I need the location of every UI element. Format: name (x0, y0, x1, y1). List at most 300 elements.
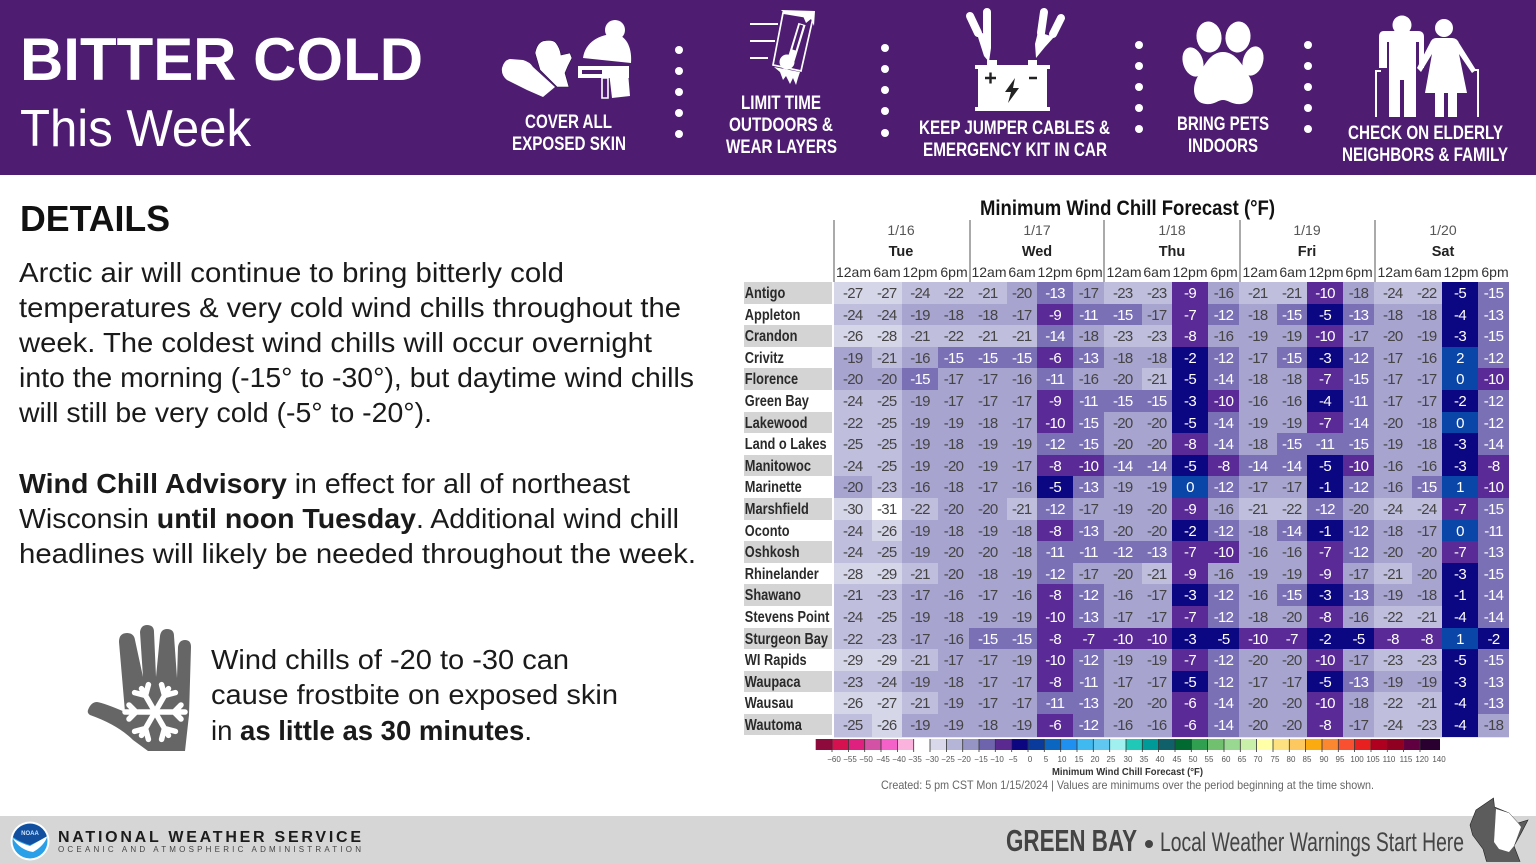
row: Marinette: -19 (1113, 479, 1133, 496)
chart column headers: Sat (1432, 244, 1454, 260)
row: Oshkosh: -7 (1184, 544, 1196, 561)
row: Antigo: -5 (1454, 285, 1466, 302)
chart column headers: 6pm (1210, 264, 1238, 280)
row: Rhinelander: -20 (1113, 566, 1133, 583)
footer bar (0, 798, 1536, 864)
row: Shawano: -3 (1184, 587, 1196, 604)
row: Crivitz: -19 (843, 350, 863, 367)
row: Wautoma: -16 (1147, 717, 1167, 734)
chart column headers: 12am (1377, 264, 1413, 280)
row: WI Rapids: -20 (1282, 652, 1302, 669)
chart column headers: 6am (1143, 264, 1171, 280)
chart column headers: 12pm (1037, 264, 1073, 280)
row: Waupaca: -17 (1012, 674, 1032, 691)
row: Stevens Point: -19 (1012, 609, 1032, 626)
row: Waupaca: Waupaca (745, 674, 801, 691)
row: Oconto: -13 (1079, 523, 1098, 540)
row: Manitowoc: -16 (1383, 458, 1403, 475)
row: Antigo: -9 (1184, 285, 1196, 302)
row: Manitowoc: -8 (1488, 458, 1499, 475)
row: Lakewood: -14 (1214, 415, 1233, 432)
row: Waupaca: -3 (1454, 674, 1466, 691)
row: Rhinelander: -17 (1079, 566, 1098, 583)
row: Antigo: -17 (1079, 285, 1098, 302)
icon: mittens, hat and scarf (502, 20, 631, 98)
row: Wautoma: -19 (1012, 717, 1032, 734)
row: Wautoma: -16 (1113, 717, 1133, 734)
row: Appleton: -24 (843, 307, 863, 324)
chart column headers: Fri (1298, 244, 1316, 260)
bullet (1145, 840, 1153, 848)
row: Appleton: -13 (1349, 307, 1368, 324)
legend tick labels: 65 (1238, 755, 1247, 764)
row: Oconto: -2 (1184, 523, 1196, 540)
row: Marshfield: -20 (944, 501, 963, 518)
row: Lakewood: -19 (1282, 415, 1302, 432)
row: Land o Lakes: -18 (944, 436, 963, 453)
row: Stevens Point: -4 (1454, 609, 1466, 626)
row: Marinette: -17 (1248, 479, 1268, 496)
NOAA logo (10, 822, 50, 860)
row: Lakewood: -25 (877, 415, 897, 432)
row: Rhinelander: -16 (1214, 566, 1233, 583)
row: Florence: -18 (1282, 371, 1302, 388)
row: Oconto: -24 (843, 523, 863, 540)
row: Appleton: -12 (1214, 307, 1233, 324)
label: keep jumper cables: KEEP JUMPER CABLES & (919, 118, 1110, 139)
chart column headers: 6pm (1345, 264, 1373, 280)
row: WI Rapids: -15 (1484, 652, 1503, 669)
row: Stevens Point: -18 (944, 609, 963, 626)
row: Wausau: -6 (1184, 695, 1196, 712)
legend tick labels: 95 (1336, 755, 1345, 764)
row: Waupaca: -17 (1113, 674, 1133, 691)
row: Land o Lakes: Land o Lakes (745, 436, 827, 453)
row: Marshfield: -20 (1349, 501, 1368, 518)
row: Wautoma: -6 (1184, 717, 1196, 734)
row: Wautoma: -25 (843, 717, 863, 734)
row: Oconto: -12 (1349, 523, 1368, 540)
row: WI Rapids: -17 (978, 652, 998, 669)
row: WI Rapids: -23 (1383, 652, 1403, 669)
legend tick labels: 50 (1189, 755, 1198, 764)
row: Florence: -17 (1417, 371, 1437, 388)
row: Marshfield: -20 (1147, 501, 1167, 518)
row: Manitowoc: -5 (1184, 458, 1196, 475)
label: check on elderly: CHECK ON ELDERLY (1348, 123, 1503, 144)
row: WI Rapids: -29 (843, 652, 863, 669)
row: Crivitz: -15 (978, 350, 998, 367)
chart column headers: Tue (889, 244, 913, 260)
row: Appleton: -13 (1484, 307, 1503, 324)
row: Rhinelander: -12 (1045, 566, 1065, 583)
row: Green Bay: -15 (1113, 393, 1133, 410)
row: Green Bay: Green Bay (745, 393, 809, 410)
row: Green Bay: -17 (978, 393, 998, 410)
row: Oconto (745, 520, 1509, 541)
row: Antigo (744, 282, 1509, 304)
row: Shawano: Shawano (745, 587, 801, 604)
row: Oshkosh: -25 (877, 544, 897, 561)
row: Rhinelander: -19 (1012, 566, 1032, 583)
row: Marinette: -16 (910, 479, 930, 496)
row: Manitowoc: -8 (1049, 458, 1061, 475)
row: Crandon: -21 (1012, 328, 1032, 345)
row: Antigo: -21 (978, 285, 998, 302)
legend tick labels: 20 (1091, 755, 1100, 764)
row: Marshfield: -19 (1113, 501, 1133, 518)
row: Rhinelander: -15 (1484, 566, 1503, 583)
row: Land o Lakes: -25 (877, 436, 897, 453)
legend tick labels: 5 (1044, 755, 1049, 764)
row: Oconto: -20 (1147, 523, 1167, 540)
chart column headers: 12am (971, 264, 1007, 280)
row: Shawano: -16 (944, 587, 963, 604)
row: Oshkosh: -20 (1417, 544, 1437, 561)
row: Oshkosh: -16 (1248, 544, 1268, 561)
row: Sturgeon Bay: -23 (877, 630, 897, 648)
row: Green Bay: -25 (877, 393, 897, 410)
row: Oshkosh: -7 (1454, 544, 1466, 561)
row: Sturgeon Bay: -10 (1248, 630, 1268, 648)
row: Shawano: -13 (1349, 587, 1368, 604)
row: Waupaca: -17 (1147, 674, 1167, 691)
row: Marinette: -17 (978, 479, 998, 496)
row: Marshfield: -15 (1484, 501, 1503, 518)
label: keep jumper cables: EMERGENCY KIT IN CAR (923, 140, 1107, 161)
row: Green Bay: -17 (1383, 393, 1403, 410)
row: Manitowoc: Manitowoc (745, 458, 811, 475)
chart column headers: 6pm (1075, 264, 1103, 280)
details paragraph 2: advisory (19, 468, 696, 569)
row: Stevens Point: -16 (1349, 609, 1368, 626)
creation note: Created: 5 pm CST Mon 1/15/2024 | Values are minimums over the period beginning at the time shown. (881, 778, 1374, 792)
icon: elderly couple (1375, 16, 1479, 117)
row: Manitowoc: -14 (1248, 458, 1268, 475)
row: Rhinelander: -17 (1349, 566, 1368, 583)
row: Crivitz: -18 (1147, 350, 1167, 367)
row: Sturgeon Bay: -8 (1421, 630, 1433, 648)
row: Sturgeon Bay: -2 (1319, 630, 1331, 648)
row: Crandon: -22 (944, 328, 963, 345)
row: Sturgeon Bay: -16 (944, 630, 963, 648)
row: WI Rapids: -12 (1079, 652, 1098, 669)
row: Wausau: -21 (910, 695, 930, 712)
row: Waupaca: -19 (1383, 674, 1403, 691)
row: Crandon: -8 (1184, 328, 1196, 345)
row: Florence: -11 (1046, 371, 1064, 388)
chart column headers: 6am (1279, 264, 1307, 280)
row: Green Bay: -15 (1147, 393, 1167, 410)
row: Crivitz: -3 (1319, 350, 1331, 367)
row: Waupaca: -23 (843, 674, 863, 691)
label: limit time outdoors: WEAR LAYERS (726, 137, 837, 158)
chart column headers: 6am (1414, 264, 1442, 280)
row: Antigo: -27 (843, 285, 863, 302)
row: Manitowoc: -25 (877, 458, 897, 475)
chart column headers: 1/18 (1158, 222, 1186, 238)
row: Marinette: -20 (843, 479, 863, 496)
row: Green Bay: -4 (1319, 393, 1331, 410)
row: Crandon: Crandon (745, 328, 797, 345)
row: Sturgeon Bay: -15 (978, 630, 998, 648)
row: Appleton: -4 (1454, 307, 1466, 324)
row: Wausau: -17 (1012, 695, 1032, 712)
row: Marinette: -1 (1319, 479, 1331, 496)
row: Stevens Point: -25 (877, 609, 897, 626)
legend tick labels: 15 (1075, 755, 1084, 764)
row: Shawano: -12 (1079, 587, 1098, 604)
row: Lakewood (744, 412, 1509, 433)
row: Oconto: -1 (1319, 523, 1331, 540)
row: Crivitz: -17 (1248, 350, 1268, 367)
label: bring pets indoors: INDOORS (1188, 136, 1258, 157)
row: Green Bay: -3 (1184, 393, 1196, 410)
row: Antigo: -20 (1012, 285, 1032, 302)
row: Green Bay: -2 (1454, 393, 1466, 410)
chart column headers: 12pm (1443, 264, 1479, 280)
row: Antigo: -21 (1248, 285, 1268, 302)
NOAA logo: NOAA (21, 831, 39, 837)
row: Manitowoc: -10 (1079, 458, 1098, 475)
row: Crivitz: -17 (1383, 350, 1403, 367)
chart column headers: 1/17 (1023, 222, 1051, 238)
row: Crandon: -16 (1214, 328, 1233, 345)
row: Green Bay: -16 (1248, 393, 1268, 410)
legend tick labels: 35 (1140, 755, 1149, 764)
row: Oshkosh: -18 (1012, 544, 1032, 561)
row: Marinette: 1 (1456, 479, 1464, 496)
row: Marshfield: -22 (1282, 501, 1302, 518)
row: Land o Lakes: -19 (910, 436, 930, 453)
row: Crandon: -19 (1248, 328, 1268, 345)
row: Appleton: -5 (1319, 307, 1331, 324)
row: Oconto: 0 (1456, 523, 1464, 540)
row: Stevens Point: -22 (1383, 609, 1403, 626)
icon: hand with snowflake (88, 625, 191, 751)
row: Wautoma (744, 714, 1509, 738)
row: Shawano: -1 (1454, 587, 1466, 604)
row: Antigo: -21 (1282, 285, 1302, 302)
row: Oshkosh: -10 (1214, 544, 1233, 561)
row: Rhinelander: -21 (910, 566, 930, 583)
row: Wausau (744, 692, 1509, 714)
row: Crandon: -10 (1315, 328, 1335, 345)
row: Sturgeon Bay: -7 (1286, 630, 1298, 648)
legend tick labels: −35 (908, 755, 922, 764)
row: Sturgeon Bay: -2 (1488, 630, 1499, 648)
row: Florence: -10 (1484, 371, 1503, 388)
icon: paw print (1179, 20, 1267, 104)
legend tick labels: 100 (1350, 755, 1364, 764)
row: Land o Lakes: -15 (1282, 436, 1302, 453)
row: Rhinelander: -19 (1282, 566, 1302, 583)
row: Manitowoc: -20 (944, 458, 963, 475)
row: Oconto: -20 (1113, 523, 1133, 540)
row: Lakewood: -19 (910, 415, 930, 432)
row: Appleton: -17 (1012, 307, 1032, 324)
row: Crandon: -19 (1417, 328, 1437, 345)
row: Stevens Point: -17 (1113, 609, 1133, 626)
legend tick labels: −15 (974, 755, 988, 764)
row: Wautoma: -18 (1484, 717, 1503, 734)
row: Oconto: -12 (1214, 523, 1233, 540)
row: Land o Lakes: -20 (1147, 436, 1167, 453)
row: Antigo: -16 (1214, 285, 1233, 302)
row: Crivitz: -12 (1349, 350, 1368, 367)
row: Manitowoc: -3 (1454, 458, 1466, 475)
row: Sturgeon Bay: -3 (1184, 630, 1196, 648)
row: Shawano: -21 (843, 587, 863, 604)
row: Green Bay: -19 (910, 393, 930, 410)
row: Marinette (745, 476, 1509, 498)
legend tick labels: −45 (876, 755, 890, 764)
legend tick labels: −25 (941, 755, 955, 764)
row: Sturgeon Bay: -7 (1083, 630, 1094, 648)
row: Crivitz: -15 (1282, 350, 1302, 367)
legend tick labels: −5 (1008, 755, 1018, 764)
row: Shawano: -19 (1383, 587, 1403, 604)
row: Marinette: -13 (1079, 479, 1098, 496)
row: Oconto: Oconto (745, 523, 790, 540)
row: Rhinelander: -9 (1319, 566, 1331, 583)
row: WI Rapids: -7 (1184, 652, 1196, 669)
row: Appleton: -18 (1417, 307, 1437, 324)
row: Rhinelander: -29 (877, 566, 897, 583)
row: Marshfield: Marshfield (745, 501, 809, 518)
row: Antigo: -18 (1349, 285, 1368, 302)
legend tick labels: 45 (1173, 755, 1182, 764)
row: Wautoma: -8 (1319, 717, 1331, 734)
row: Crivitz (745, 347, 1509, 368)
row: Manitowoc: -10 (1349, 458, 1368, 475)
legend tick labels: 0 (1028, 755, 1033, 764)
row: Oshkosh: -13 (1484, 544, 1503, 561)
row: Lakewood: -20 (1147, 415, 1167, 432)
row: Marinette: -18 (944, 479, 963, 496)
row: Marshfield: -21 (1248, 501, 1268, 518)
row: Manitowoc: -24 (843, 458, 863, 475)
row: Antigo: -22 (944, 285, 963, 302)
row: Crivitz: -12 (1484, 350, 1503, 367)
row: Manitowoc: -19 (978, 458, 998, 475)
row: Wautoma: -6 (1049, 717, 1061, 734)
row: Appleton: -17 (1147, 307, 1167, 324)
row: Green Bay: -24 (843, 393, 863, 410)
row: Appleton: -7 (1184, 307, 1196, 324)
legend tick labels: 110 (1383, 755, 1396, 764)
row: Lakewood: -19 (1248, 415, 1268, 432)
row: Crandon: -21 (978, 328, 998, 345)
legend tick labels: −60 (827, 755, 841, 764)
row: Wausau: -11 (1046, 695, 1064, 712)
details paragraph 2: advisory: Wind Chill Advisory in effect for all of northeast (19, 468, 630, 499)
row: Lakewood: Lakewood (745, 415, 807, 432)
row: Florence: -7 (1319, 371, 1331, 388)
row: WI Rapids: WI Rapids (745, 652, 807, 669)
row: Sturgeon Bay: -8 (1049, 630, 1061, 648)
dots separator 2 (881, 44, 889, 137)
row: Florence: -17 (944, 371, 963, 388)
row: Manitowoc: -19 (910, 458, 930, 475)
row: Wausau: -13 (1079, 695, 1098, 712)
icon: frozen thermometer (750, 10, 815, 85)
row: Antigo: -10 (1315, 285, 1335, 302)
row: Waupaca: -11 (1079, 674, 1098, 691)
row: Marshfield (744, 498, 1509, 520)
row: Antigo: -24 (1383, 285, 1403, 302)
details heading: DETAILS (20, 198, 170, 239)
row: Wautoma: -12 (1079, 717, 1098, 734)
row: WI Rapids: -5 (1454, 652, 1466, 669)
row: Oshkosh: -16 (1282, 544, 1302, 561)
row: Waupaca: -19 (910, 674, 930, 691)
row: Lakewood: -20 (1383, 415, 1403, 432)
row: Rhinelander: -28 (843, 566, 863, 583)
row: Land o Lakes: -19 (1012, 436, 1032, 453)
row: Appleton: -18 (1383, 307, 1403, 324)
row: Sturgeon Bay: -10 (1113, 630, 1133, 648)
row: Wautoma: -19 (944, 717, 963, 734)
row: Waupaca: -18 (944, 674, 963, 691)
row: Marshfield: -24 (1383, 501, 1403, 518)
row: Oshkosh: -24 (843, 544, 863, 561)
row: Appleton (745, 304, 1509, 325)
row: Oconto: -18 (944, 523, 963, 540)
frostbite callout text (211, 644, 618, 746)
row: Manitowoc: -17 (1012, 458, 1032, 475)
row: Shawano: -16 (1248, 587, 1268, 604)
row: Wautoma: -14 (1214, 717, 1233, 734)
row: Oshkosh (744, 541, 1509, 563)
legend tick labels: −30 (925, 755, 939, 764)
row: Crandon: -23 (1147, 328, 1167, 345)
row: Crivitz: -12 (1214, 350, 1233, 367)
row: Waupaca: -5 (1319, 674, 1331, 691)
row: Land o Lakes: -12 (1045, 436, 1065, 453)
legend tick labels: −55 (843, 755, 857, 764)
legend tick labels: −50 (859, 755, 873, 764)
row: Stevens Point: Stevens Point (745, 609, 829, 626)
row: Wausau: -20 (1282, 695, 1302, 712)
row: WI Rapids: -12 (1214, 652, 1233, 669)
row: Florence: -17 (978, 371, 998, 388)
row: Marinette: -16 (1012, 479, 1032, 496)
row: Stevens Point: -12 (1214, 609, 1233, 626)
row: Wausau: -20 (1248, 695, 1268, 712)
row: Marinette: -12 (1349, 479, 1368, 496)
row: Florence: -5 (1184, 371, 1196, 388)
row: Shawano: -17 (1147, 587, 1167, 604)
row: Crivitz: -18 (1113, 350, 1133, 367)
legend tick labels: −20 (957, 755, 971, 764)
row: Crivitz: -15 (1012, 350, 1032, 367)
icon: jumper cables and car battery (970, 12, 1061, 111)
row: Land o Lakes: -19 (1383, 436, 1403, 453)
row: Antigo: -23 (1113, 285, 1133, 302)
row: Wautoma: -23 (1417, 717, 1437, 734)
row: Marinette: Marinette (745, 479, 802, 496)
subtitle: This Week (20, 100, 252, 158)
icon: Wisconsin map (1470, 798, 1528, 862)
row: WI Rapids: -20 (1248, 652, 1268, 669)
row: Florence: -15 (1349, 371, 1368, 388)
row: Crivitz: -15 (944, 350, 963, 367)
row: Crivitz: Crivitz (745, 350, 784, 367)
row: WI Rapids: -19 (1012, 652, 1032, 669)
title: BITTER COLD (20, 26, 423, 93)
row: Land o Lakes: -20 (1113, 436, 1133, 453)
